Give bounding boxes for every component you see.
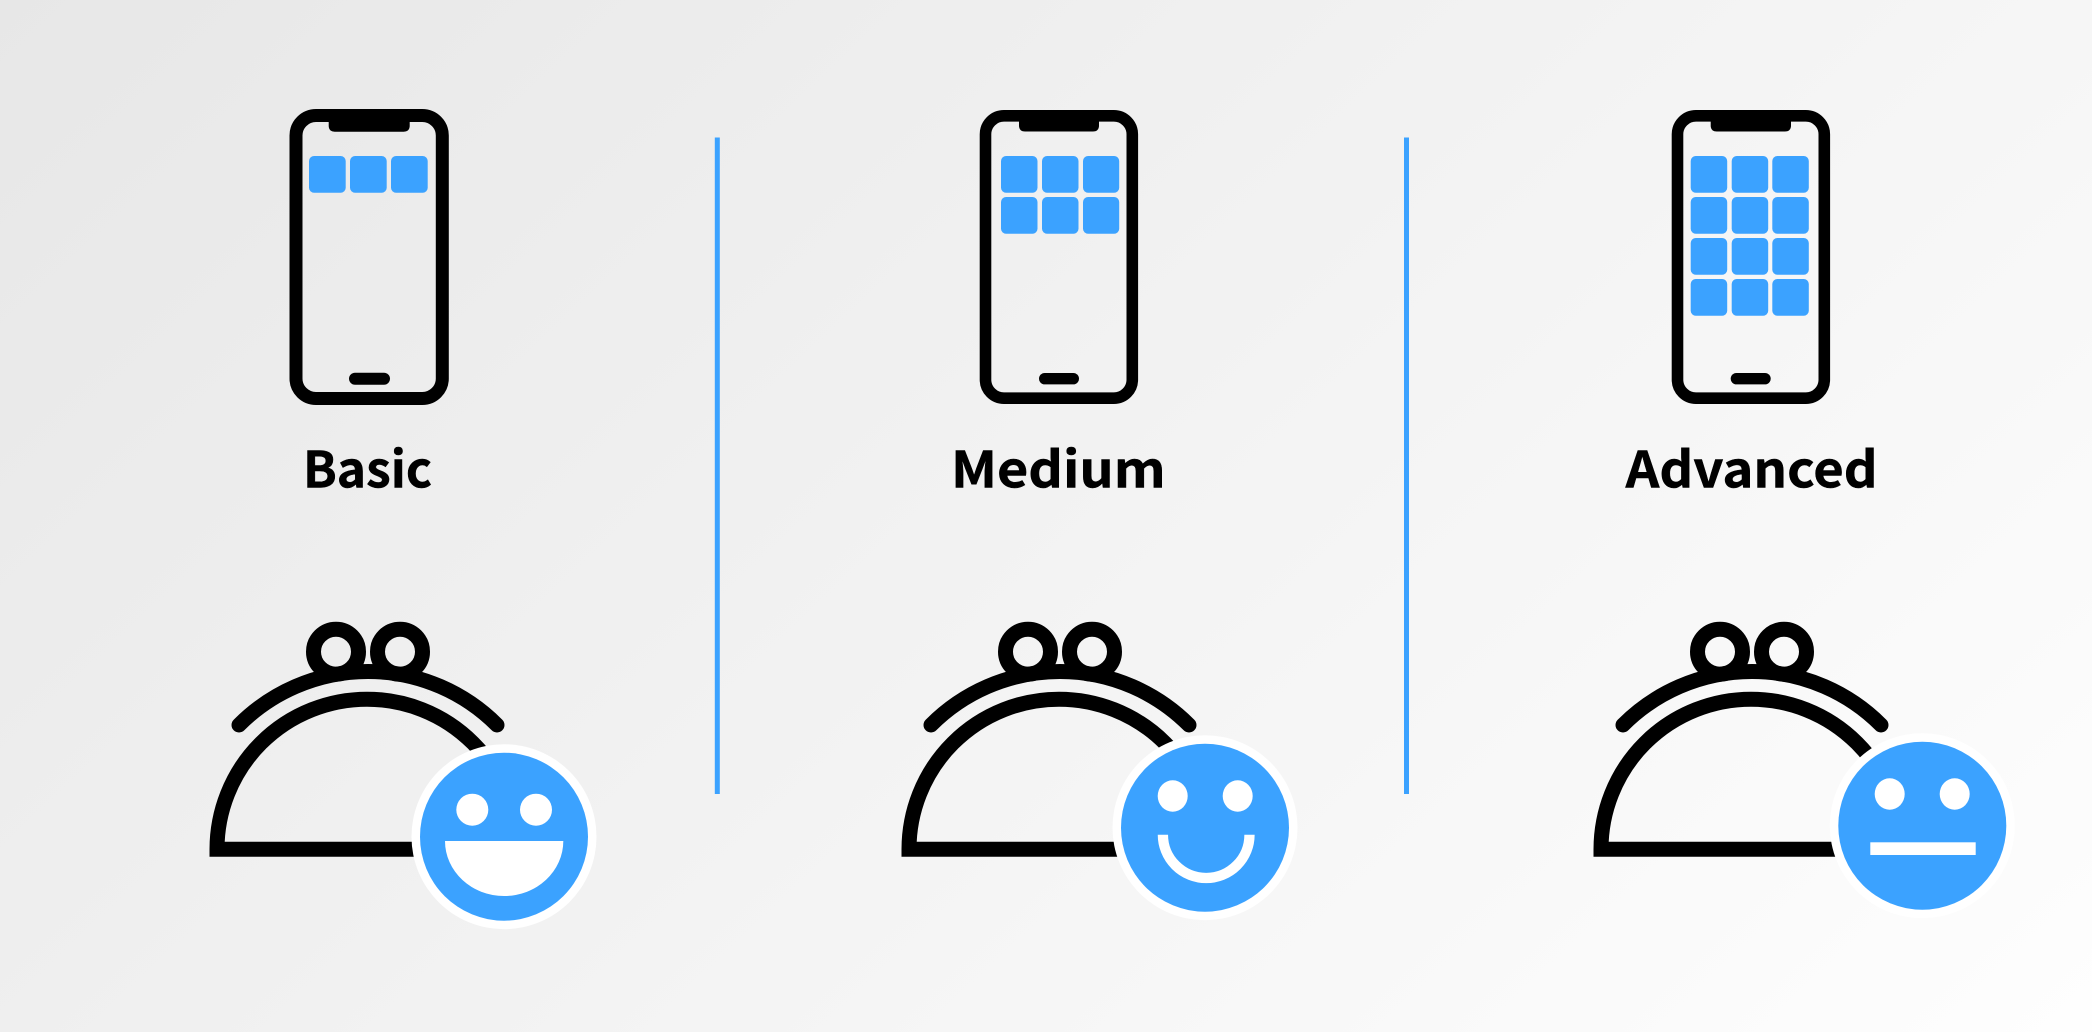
icon: neutral face	[1830, 733, 2015, 918]
heading: Advanced: Advanced	[1625, 430, 1878, 502]
icon: phone with three apps	[296, 116, 442, 398]
panel: advanced	[1601, 116, 2015, 918]
icon: phone with twelve apps	[1678, 116, 1824, 398]
icon: coin purse	[217, 629, 517, 849]
icon: coin purse	[909, 629, 1209, 849]
divider: left	[715, 138, 720, 794]
panel: basic	[217, 116, 596, 929]
icon: smiling face	[1112, 735, 1298, 920]
icon: coin purse	[1601, 629, 1901, 849]
heading: Medium: Medium	[951, 430, 1166, 502]
icon: laughing face	[412, 744, 596, 929]
divider: right	[1404, 138, 1409, 794]
panel: medium	[909, 116, 1298, 920]
heading: Basic: Basic	[303, 430, 432, 502]
icon: phone with six apps	[986, 116, 1132, 398]
